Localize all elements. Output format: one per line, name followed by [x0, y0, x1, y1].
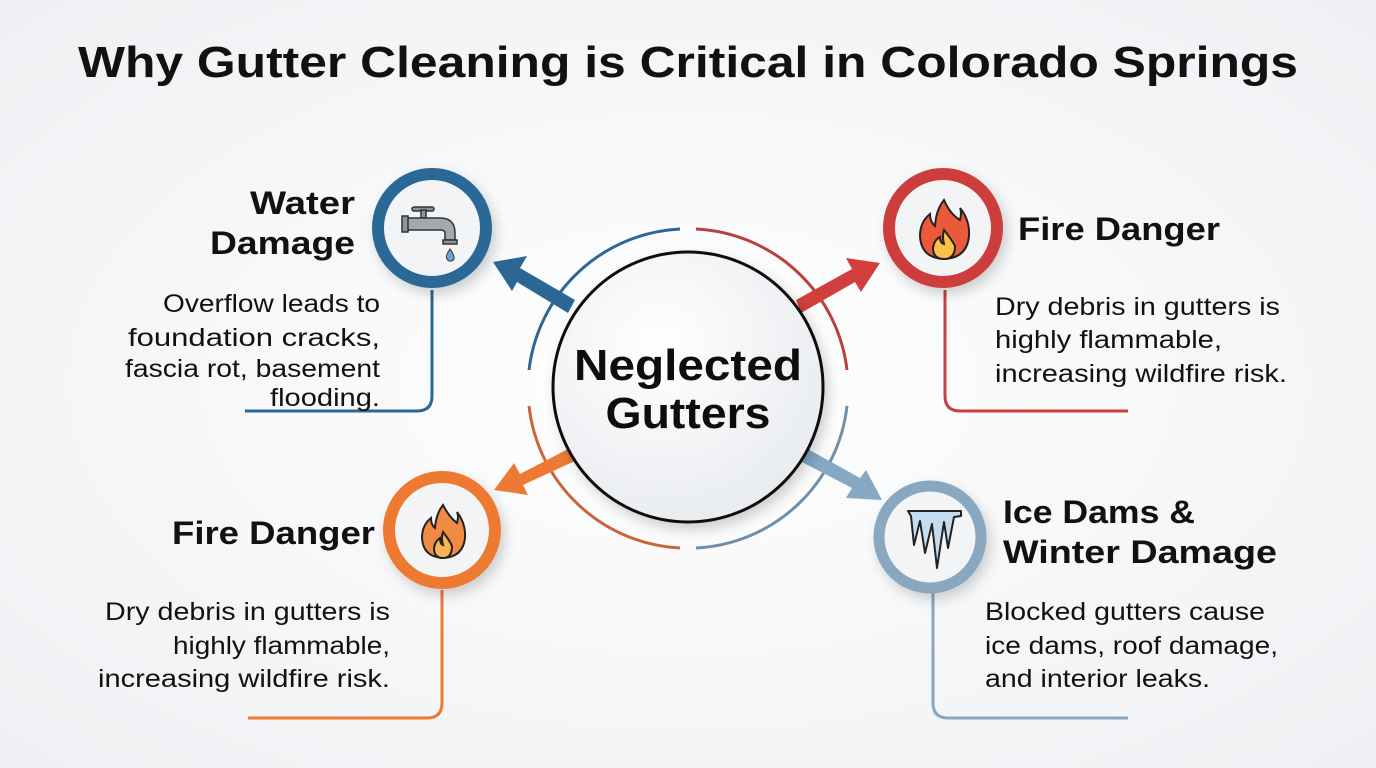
text block: fascia rot, basement [125, 355, 380, 383]
panel: ice dams [879, 486, 1278, 718]
text block: highly flammable, [173, 632, 390, 660]
text block: Dry debris in gutters is [995, 293, 1280, 321]
panel: water damage [125, 174, 486, 412]
text block: Overflow leads to [163, 290, 380, 318]
text block: and interior leaks. [985, 665, 1210, 693]
panel: fire danger red [889, 174, 1287, 411]
text block: Dry debris in gutters is [105, 598, 390, 626]
heading: Water [250, 185, 355, 221]
text block: ice dams, roof damage, [985, 632, 1278, 660]
text block: flooding. [270, 384, 380, 412]
icon: faucet [378, 174, 486, 282]
arrow: to fire danger orange [494, 448, 577, 495]
center circle: Neglected Gutters: Neglected [574, 341, 802, 390]
center circle: Neglected Gutters [553, 252, 823, 522]
text block: foundation cracks, [128, 324, 380, 352]
text block: increasing wildfire risk. [995, 360, 1287, 388]
icon: flame orange [389, 477, 495, 583]
text block [125, 290, 380, 412]
heading: Winter Damage [1003, 534, 1277, 570]
heading [210, 185, 355, 261]
arrow: to water damage [493, 256, 575, 313]
text block [985, 598, 1278, 693]
heading: Ice Dams & [1003, 494, 1195, 530]
panel: fire danger orange [98, 477, 495, 718]
text block: Blocked gutters cause [985, 598, 1265, 626]
icon: flame red [889, 174, 997, 282]
center circle: Neglected Gutters: Gutters [606, 389, 770, 438]
text block [98, 598, 390, 693]
text block: increasing wildfire risk. [98, 665, 390, 693]
title: Why Gutter Cleaning is Critical in Colorado Springs [78, 38, 1298, 87]
arrow: to fire danger red [796, 258, 880, 313]
heading: Fire Danger [1018, 211, 1220, 247]
heading [1003, 494, 1277, 570]
arrow: to ice dams [798, 448, 882, 500]
text block [995, 293, 1287, 388]
text block: highly flammable, [995, 326, 1222, 354]
icon: icicles [879, 486, 981, 588]
heading: Damage [210, 225, 355, 261]
outer arcs around center [529, 229, 847, 548]
heading: Fire Danger [172, 515, 375, 551]
